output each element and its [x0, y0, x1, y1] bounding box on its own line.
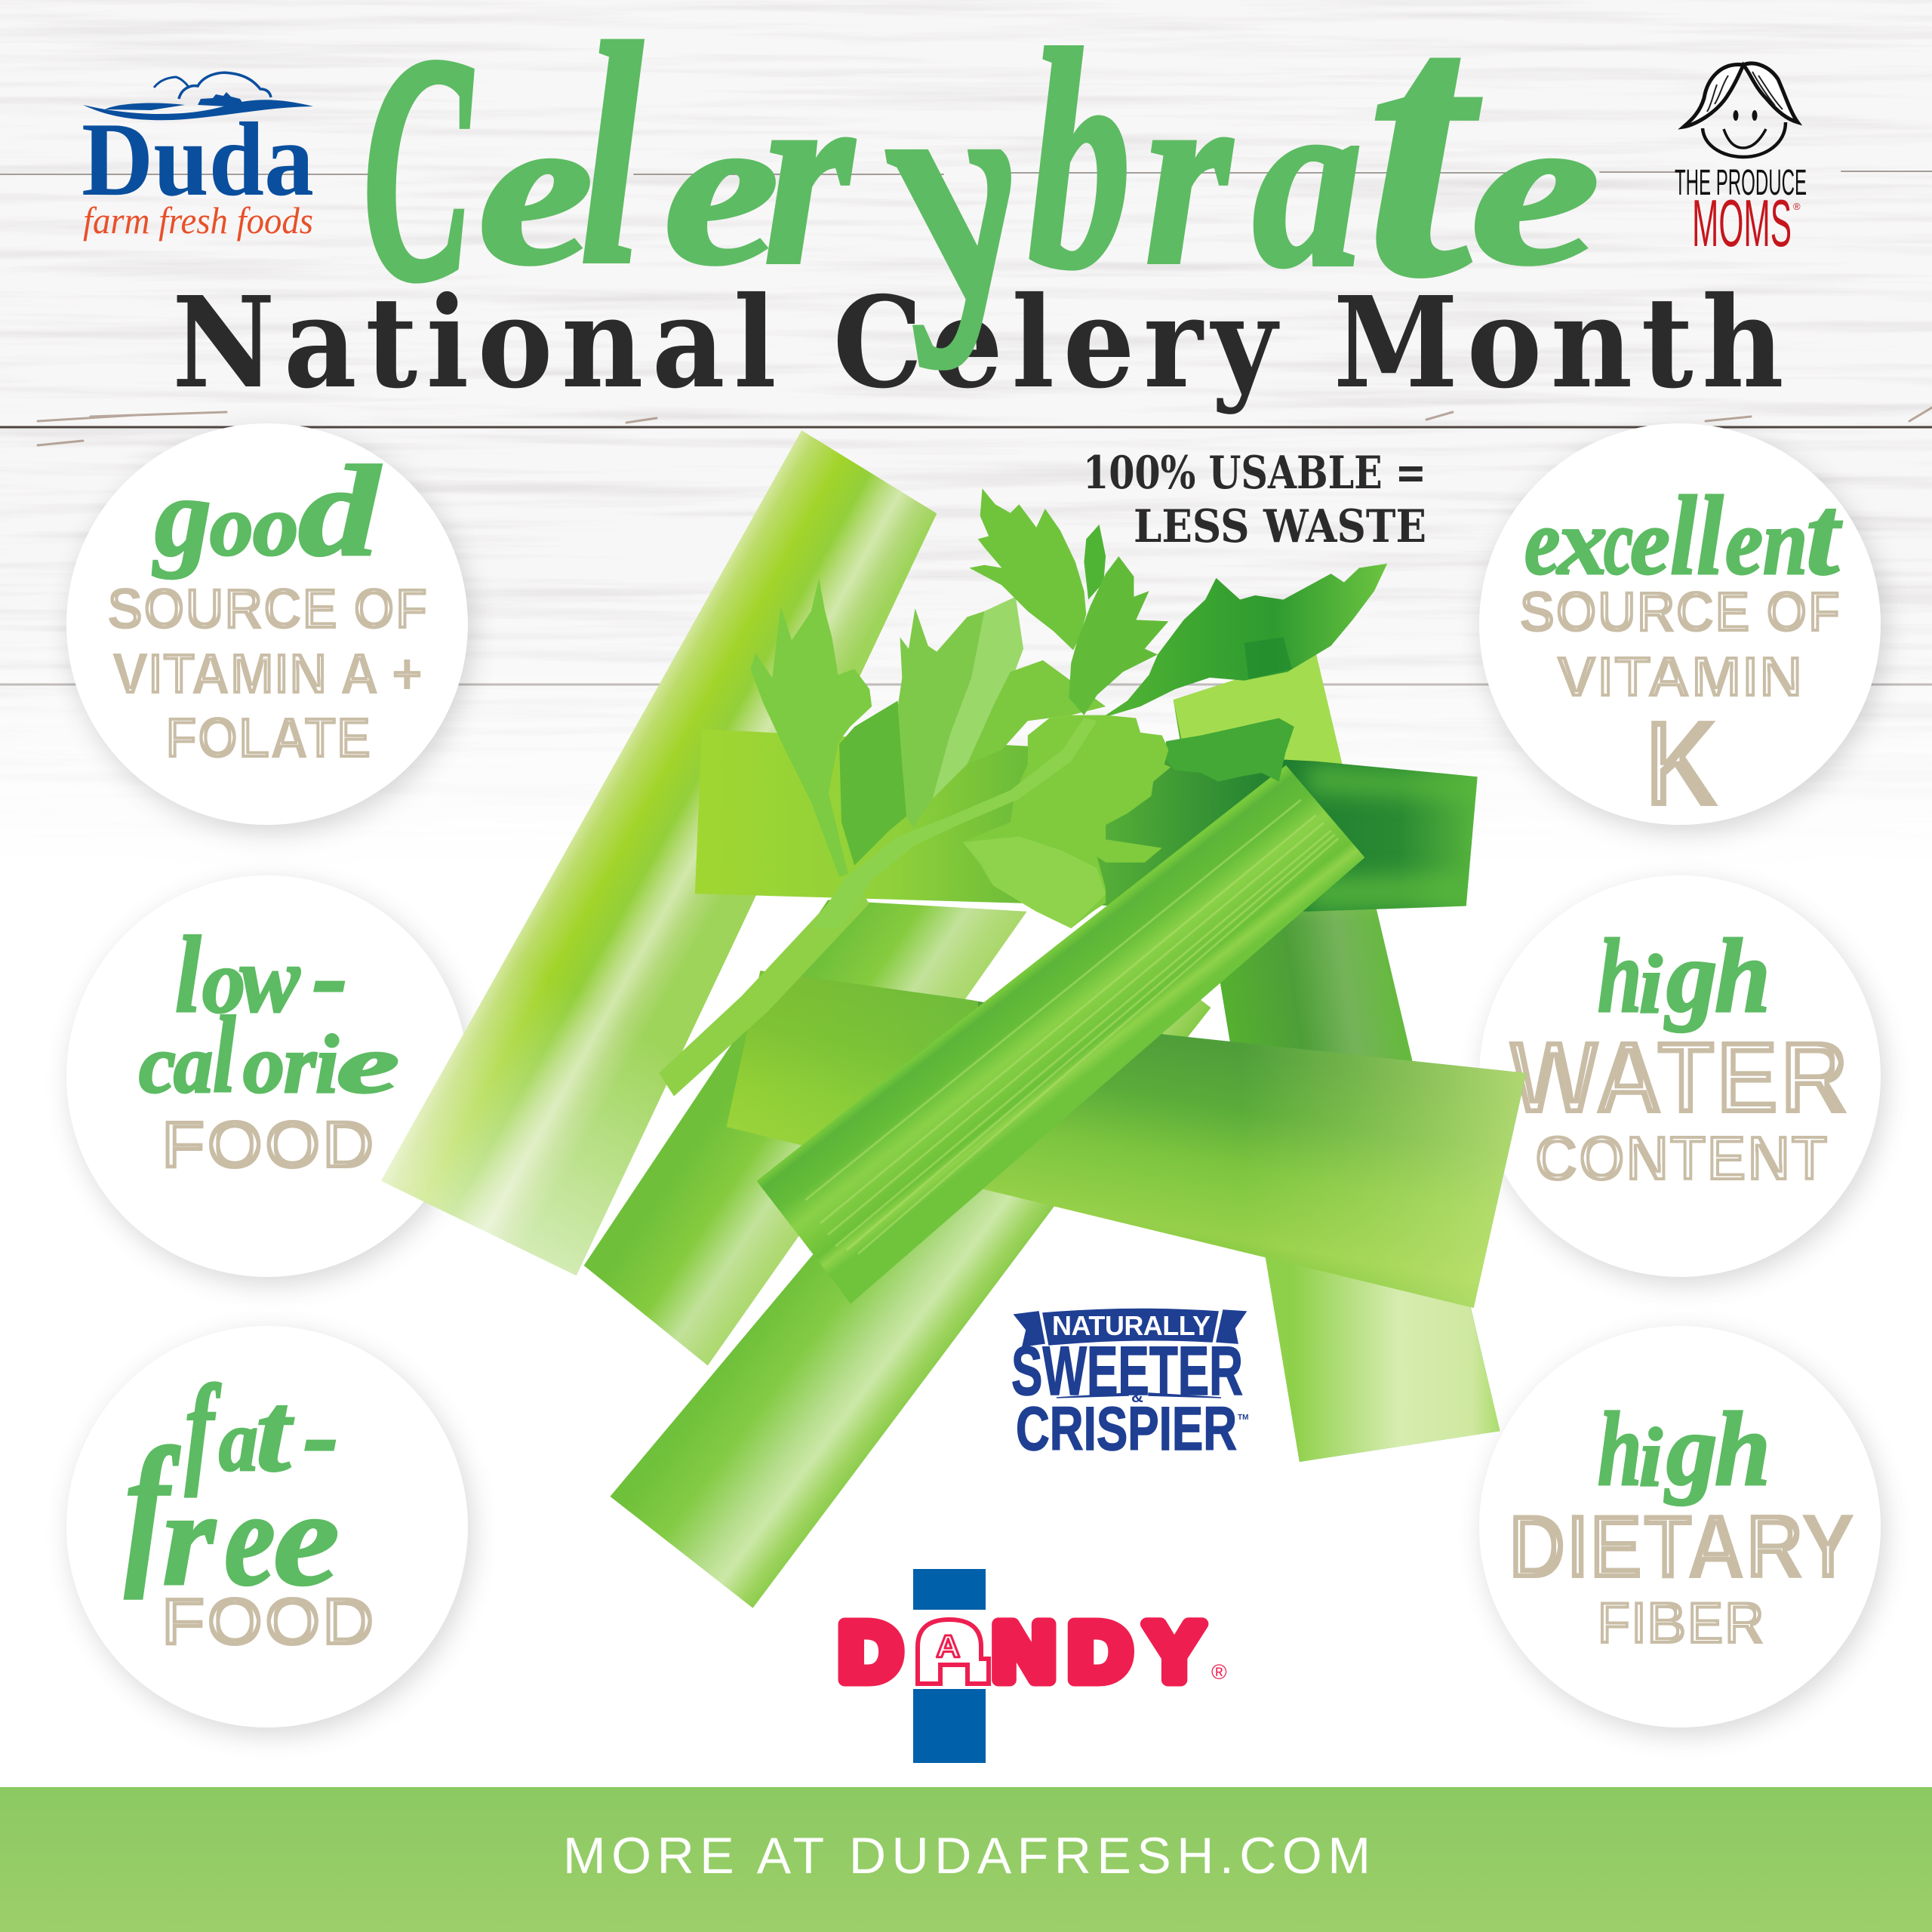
script word: excellent: l	[1670, 473, 1697, 598]
script word: high	[1598, 1391, 1770, 1508]
logo: Dandy: A	[936, 1629, 960, 1665]
script word: low-calorie: -	[312, 918, 348, 1035]
logo: Duda farm fresh foods: farm fresh foods	[83, 199, 313, 242]
leaf: left feathery	[750, 578, 872, 877]
title: Celerybrate: a	[1253, 43, 1362, 318]
script word: excellent: t	[1806, 473, 1839, 598]
script word: high: g	[1666, 921, 1718, 1033]
panel: good source of vitamin A + folate	[66, 423, 468, 825]
label: source of vitamin K: K	[1644, 694, 1719, 832]
script word: excellent: l	[1697, 473, 1723, 598]
stalk: bottom long	[610, 996, 1211, 1608]
script word: low-calorie: r	[284, 1018, 316, 1110]
stalk: wide horizontal right	[727, 971, 1526, 1308]
script word: excellent: e	[1725, 491, 1763, 595]
footer band: MORE AT DUDAFRESH.COM	[563, 1827, 1371, 1884]
script word: high: i	[1639, 1411, 1663, 1503]
logo: naturally sweeter & crispier: TM	[1238, 1414, 1248, 1422]
label: source of vitamin A + folate: FOLATE	[165, 706, 371, 771]
panel: excellent source of vitamin K	[1479, 423, 1881, 825]
stalk: behind lower-left	[584, 900, 1027, 1366]
title: Celerybrate: C	[364, 0, 471, 346]
leaf branch	[811, 718, 1097, 928]
label: food: FOOD	[161, 1106, 375, 1183]
leaf: center right lobe	[967, 660, 1106, 764]
logo: naturally sweeter & crispier: &	[1131, 1387, 1143, 1406]
script word: good: d	[298, 440, 379, 583]
script word: fat-free	[124, 1359, 340, 1614]
script word: high: h	[1598, 1391, 1641, 1508]
leaf: top	[969, 488, 1086, 651]
script word: low-calorie: o	[243, 1018, 285, 1110]
script word: fat-free: f	[185, 1359, 214, 1497]
script word: excellent: x	[1558, 491, 1607, 595]
script word: low-calorie: e	[337, 1018, 399, 1110]
leaf: center big	[963, 715, 1171, 928]
script word: excellent: n	[1763, 491, 1807, 595]
script word: fat-free: e	[273, 1463, 340, 1614]
leaf: top right dark	[1101, 564, 1387, 718]
script word: low-calorie: w	[240, 928, 300, 1032]
label: dietary fiber: DIETARY	[1508, 1495, 1855, 1598]
title: Celerybrate: r	[764, 30, 853, 318]
script word: low-calorie	[139, 915, 399, 1115]
logo: Duda farm fresh foods: Duda	[82, 101, 314, 218]
logo: naturally sweeter & crispier: NATURALLY	[1052, 1310, 1211, 1341]
script word: fat-free: r	[162, 1463, 215, 1614]
title: Celerybrate: e	[1471, 70, 1600, 309]
stalk: right vertical	[1174, 654, 1500, 1462]
logo: Dandy: D	[839, 1606, 902, 1697]
leaf: lower between	[839, 701, 906, 866]
script word: good	[151, 440, 383, 583]
logo: The Produce Moms: ®	[1793, 201, 1801, 212]
script word: low-calorie: a	[174, 1018, 213, 1110]
logo: naturally sweeter & crispier: CRISPIER	[1016, 1395, 1237, 1463]
label: source of vitamin K: VITAMIN	[1556, 645, 1803, 709]
script word: low-calorie: i	[315, 1018, 339, 1110]
leaf: under top	[1069, 556, 1168, 715]
title: Celerybrate: e	[664, 70, 779, 309]
panel: high dietary fiber	[1479, 1326, 1881, 1727]
script word: high: h	[1598, 918, 1641, 1035]
stalk: front diagonal	[756, 765, 1364, 1304]
label: dietary fiber: FIBER	[1597, 1589, 1764, 1657]
logo: The Produce Moms: MOMS	[1692, 186, 1792, 260]
script word: low-calorie: o	[202, 931, 245, 1031]
script word: good: o	[210, 478, 254, 574]
logo: Dandy: N	[992, 1606, 1055, 1697]
script word: low-calorie: l	[175, 915, 201, 1035]
script word: excellent: e	[1524, 491, 1560, 595]
script word: low-calorie: c	[139, 1018, 176, 1110]
title: Celerybrate: r	[1145, 30, 1231, 318]
leaf: lower lobe	[963, 836, 1106, 928]
leaf stem	[659, 884, 869, 1096]
illustration: celery stalks and leaves	[381, 430, 1526, 1608]
script word: excellent: e	[1630, 491, 1670, 595]
script word: high: i	[1639, 938, 1663, 1030]
title: Celerybrate	[364, 0, 1600, 371]
script word: fat-free: t	[256, 1370, 291, 1495]
logo: Dandy: D	[1069, 1606, 1131, 1697]
label: source of vitamin A + folate: VITAMIN A +	[112, 641, 423, 706]
title: Celerybrate: y	[839, 13, 1070, 368]
script word: good: g	[155, 454, 211, 580]
heading: National Celery Month: National Celery Month	[172, 269, 1784, 417]
script word: fat-free: a	[219, 1393, 258, 1489]
label: source of vitamin K: SOURCE OF	[1519, 580, 1841, 645]
logo: naturally sweeter & crispier: SWEETER	[1011, 1333, 1243, 1410]
stalk: long pale left	[381, 430, 937, 1275]
panel: fat-free food	[66, 1326, 468, 1727]
leaf: narrow top	[1084, 525, 1106, 600]
script word: high	[1598, 918, 1770, 1035]
leaf: lower right	[1162, 718, 1294, 782]
script word: fat-free: f	[125, 1414, 169, 1600]
script word: good: o	[253, 478, 298, 574]
script word: fat-free: e	[224, 1463, 275, 1614]
callout: 100% usable = less waste: 100% USABLE =	[1083, 447, 1426, 500]
logo: Dandy: ®	[1211, 1660, 1227, 1684]
label: water content: WATER	[1509, 1020, 1849, 1136]
label: water content: CONTENT	[1534, 1123, 1828, 1195]
label: source of vitamin A + folate: SOURCE OF	[107, 577, 428, 641]
panel: low-calorie food	[66, 875, 468, 1277]
panel: high water content	[1479, 875, 1881, 1277]
title: Celerybrate: e	[478, 70, 593, 309]
logo: The Produce Moms: THE PRODUCE	[1675, 163, 1807, 203]
script word: excellent	[1524, 473, 1843, 598]
label: food: FOOD	[161, 1583, 375, 1660]
script word: high: h	[1715, 918, 1770, 1035]
script word: high: g	[1666, 1394, 1718, 1506]
leaf: center feather	[898, 597, 1023, 828]
script word: low-calorie: l	[213, 995, 235, 1115]
stalk: horizontal dark top	[695, 729, 1478, 912]
script word: excellent: c	[1604, 491, 1633, 595]
logo: Dandy: Y	[1146, 1606, 1203, 1697]
script word: fat-free: -	[303, 1377, 339, 1494]
callout: 100% usable = less waste: LESS WASTE	[1134, 500, 1426, 553]
script word: high: h	[1715, 1391, 1770, 1508]
